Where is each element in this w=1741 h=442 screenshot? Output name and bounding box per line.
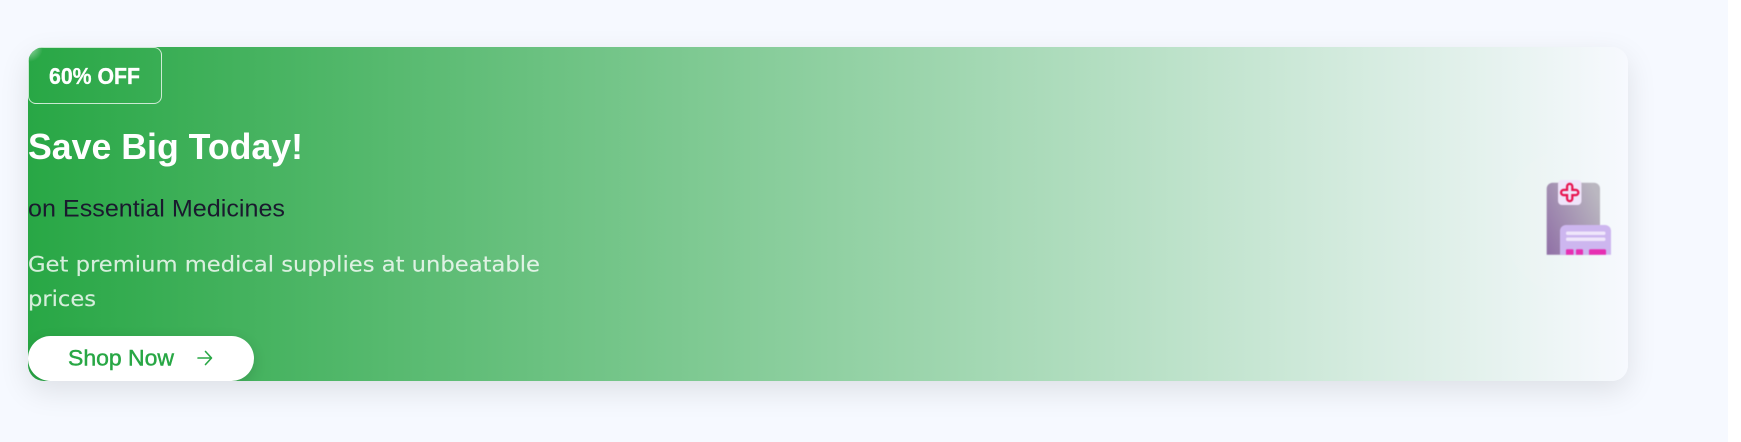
subheading: on Essential Medicines xyxy=(28,196,285,222)
badge label: 60% OFF xyxy=(49,63,140,89)
heading: Save Big Today! xyxy=(28,126,303,167)
description text xyxy=(28,252,540,312)
description text: Get premium medical supplies at unbeatable xyxy=(28,252,540,278)
button: shop now xyxy=(28,336,254,381)
button label: Shop Now xyxy=(68,346,175,370)
icon: arrow right xyxy=(198,352,212,364)
panel: discount banner xyxy=(28,47,1628,381)
badge: 60% off xyxy=(28,47,162,104)
icon: hospital building xyxy=(1546,180,1612,256)
description text: prices xyxy=(28,287,96,312)
